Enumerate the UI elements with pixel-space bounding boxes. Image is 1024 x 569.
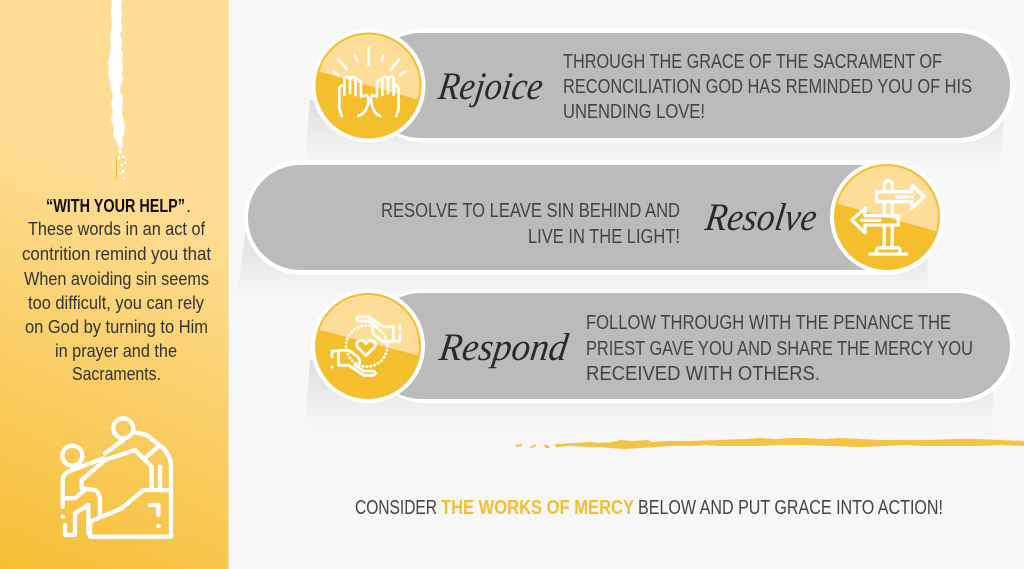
quote text: These words in an act of: [28, 218, 206, 239]
text block: respond: [586, 312, 973, 385]
quote text: too difficult, you can rely: [28, 292, 205, 313]
text block: resolve: LIVE IN THE LIGHT!: [528, 226, 680, 248]
panel: respond: [307, 289, 1010, 406]
quote text: on God by turning to Him: [25, 316, 208, 337]
heading: Rejoice: Rejoice: [435, 65, 546, 108]
callout: works of mercy: CONSIDER: [355, 497, 437, 519]
heading: Resolve: Resolve: [702, 196, 820, 239]
panel: resolve: [240, 160, 940, 276]
gold brush stroke divider: [515, 438, 1024, 449]
callout: works of mercy: [355, 497, 943, 519]
text block: respond: FOLLOW THROUGH WITH THE PENANCE THE: [586, 312, 951, 334]
quote text: Sacraments.: [72, 363, 161, 384]
quote text: .: [186, 195, 191, 216]
text block: rejoice: UNENDING LOVE!: [563, 101, 705, 123]
icon: hands with heart: [313, 289, 425, 403]
heading: Respond: Respond: [436, 326, 571, 369]
quote text: [22, 195, 211, 384]
quote text: in prayer and the: [55, 340, 177, 361]
left sidebar panel: [0, 0, 228, 569]
icon: signpost: [830, 164, 940, 270]
callout: works of mercy: THE WORKS OF MERCY: [441, 497, 635, 519]
text block: rejoice: [563, 51, 972, 123]
quote text: “WITH YOUR HELP”: [46, 195, 185, 216]
callout: works of mercy: BELOW AND PUT GRACE INTO ACTION!: [638, 497, 943, 519]
quote text: When avoiding sin seems: [24, 268, 209, 289]
icon: climbers helping: [62, 418, 171, 537]
icon: raised hands: [314, 32, 426, 142]
text block: resolve: [381, 200, 680, 248]
text block: respond: RECEIVED WITH OTHERS.: [586, 363, 820, 385]
text block: resolve: RESOLVE TO LEAVE SIN BEHIND AND: [381, 200, 680, 222]
text block: rejoice: THROUGH THE GRACE OF THE SACRAMENT OF: [563, 51, 942, 73]
white brush stroke: [108, 0, 127, 179]
panel: rejoice: [307, 32, 1010, 144]
quote text: contrition remind you that: [22, 243, 211, 264]
